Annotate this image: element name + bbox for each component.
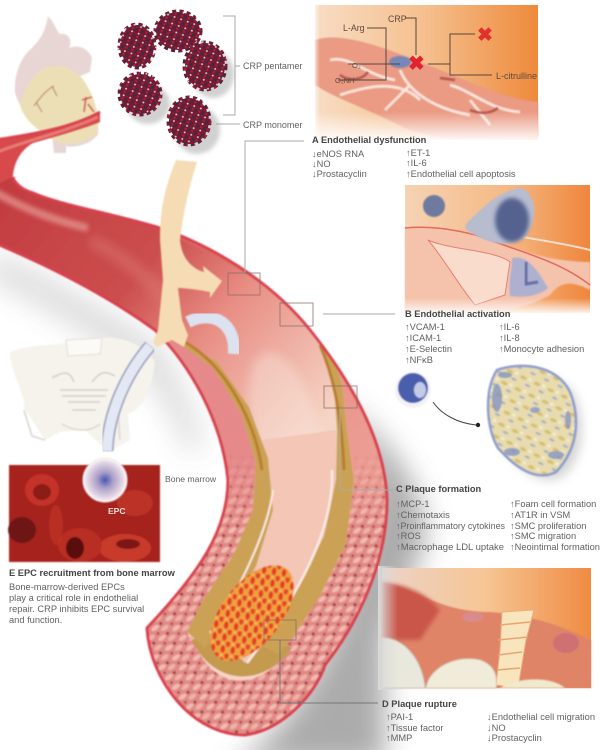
text: C plaque formation: ↑Foam cell formation <box>510 499 596 509</box>
lumen pale edges <box>210 490 273 633</box>
text: B endothelial activation: ↑IL-8 <box>499 333 520 343</box>
text: B endothelial activation: ↑VCAM-1 <box>405 322 445 332</box>
text: D plaque rupture: ↑MMP <box>386 733 412 743</box>
text: B endothelial activation: ↑Monocyte adhesion <box>499 344 584 354</box>
illustration: heart <box>15 16 98 153</box>
plaque band right <box>268 350 355 646</box>
text: D plaque rupture: D Plaque rupture <box>382 699 457 709</box>
text: B endothelial activation: ↑E-Selectin <box>405 344 452 354</box>
text: E EPC recruitment from bone marrow: repair. CRP inhibits EPC survival <box>9 604 144 614</box>
text: C plaque formation: ↑SMC proliferation <box>510 521 586 531</box>
wall cell texture <box>151 457 386 666</box>
text: C plaque formation: ↑SMC migration <box>510 531 576 541</box>
arrow: monocyte to foam cell <box>433 402 480 427</box>
illustration: foam cell <box>488 366 582 480</box>
panel: A endothelial dysfunction illustration <box>312 3 538 143</box>
label: CRP pentamer: CRP pentamer <box>243 61 302 71</box>
text: E EPC recruitment from bone marrow: and function. <box>9 615 62 625</box>
plaque rupture <box>210 564 295 662</box>
text: A endothelial dysfunction: A Endothelial dysfunction <box>312 135 427 145</box>
text: D plaque rupture: ↓Prostacyclin <box>487 733 542 743</box>
arrow: CRP to vessel <box>153 160 222 347</box>
text: C plaque formation: ↑Neointimal formation <box>510 542 600 552</box>
text: C plaque formation: ↑AT1R in VSM <box>510 510 570 520</box>
panel: EPC micrograph <box>8 465 160 562</box>
illustration: pelvis <box>10 337 155 452</box>
panel: D plaque rupture illustration <box>378 566 591 690</box>
text: D plaque rupture: ↓NO <box>487 723 506 733</box>
label: bone marrow: Bone marrow <box>165 474 217 484</box>
icon: red X on output: ✖ <box>477 25 493 46</box>
illustration: CRP pentamer clusters and monomer <box>120 12 234 154</box>
plaque band core <box>185 342 344 470</box>
text: C plaque formation <box>396 484 600 552</box>
text: C plaque formation: ↑Proinflammatory cytokines <box>396 521 505 531</box>
label: O2: O₂ <box>352 61 361 70</box>
plaque cup at lumen end <box>192 638 292 678</box>
text: A endothelial dysfunction: ↓eNOS RNA <box>312 149 365 159</box>
text: C plaque formation: ↑MCP-1 <box>396 499 430 509</box>
text: A endothelial dysfunction: ↓Prostacyclin <box>312 169 367 179</box>
right wall <box>180 238 386 520</box>
text: E EPC recruitment from bone marrow <box>9 568 176 625</box>
text: B endothelial activation: ↑IL-6 <box>499 322 520 332</box>
label: L-Arg: L-Arg <box>343 23 365 33</box>
arrow: blue curved arrow <box>188 317 234 354</box>
vessel drop shadow <box>0 250 425 750</box>
text: C plaque formation: ↑Macrophage LDL uptake <box>396 542 504 552</box>
panel: B endothelial activation illustration <box>405 185 590 315</box>
label: EPC: EPC <box>108 506 125 516</box>
text: D plaque rupture: ↓Endothelial cell migration <box>487 712 595 722</box>
text: C plaque formation: ↑Chemotaxis <box>396 510 450 520</box>
lumen highlight <box>246 350 314 440</box>
text: D plaque rupture: ↑PAI-1 <box>386 712 413 722</box>
icon: red X on eNOS: ✖ <box>408 53 425 75</box>
lumen lower part <box>242 430 336 662</box>
text: E EPC recruitment from bone marrow: E EPC recruitment from bone marrow <box>9 568 176 578</box>
text: B endothelial activation <box>405 309 584 365</box>
label: O2NH: O₂NH <box>335 76 355 85</box>
text: C plaque formation: C Plaque formation <box>396 484 482 494</box>
text: E EPC recruitment from bone marrow: Bone-marrow-derived EPCs <box>9 582 125 592</box>
icon: EPC cell <box>83 458 127 502</box>
illustration: blood vessel cross-section <box>0 112 392 735</box>
text: A endothelial dysfunction: ↑ET-1 <box>406 148 430 158</box>
text: E EPC recruitment from bone marrow: play a critical role in endothelial <box>9 593 138 603</box>
text: A endothelial dysfunction: ↑Endothelial cell apoptosis <box>406 169 516 179</box>
text: C plaque formation: ↑ROS <box>396 531 421 541</box>
text: B endothelial activation: ↑ICAM-1 <box>405 333 441 343</box>
label: CRP: CRP <box>388 14 407 24</box>
arrow: EPC tube from bone marrow <box>107 346 150 451</box>
text: A endothelial dysfunction: ↓NO <box>312 159 331 169</box>
left wall <box>168 340 257 522</box>
label: CRP monomer: CRP monomer <box>243 120 302 130</box>
callout lines and boxes <box>216 16 395 703</box>
vessel highlight streak <box>0 192 88 228</box>
text: D plaque rupture <box>382 699 595 743</box>
text: A endothelial dysfunction <box>312 135 516 179</box>
label: L-citrulline: L-citrulline <box>496 71 537 81</box>
plaque band left <box>184 344 274 640</box>
cut end of wall <box>154 636 324 734</box>
text: A endothelial dysfunction: ↑IL-6 <box>406 158 427 168</box>
text: B endothelial activation: B Endothelial activation <box>405 309 511 319</box>
narrow artery from heart <box>0 112 100 185</box>
text: B endothelial activation: ↑NFκB <box>405 355 433 365</box>
icon: monocyte <box>395 372 431 408</box>
text: D plaque rupture: ↑Tissue factor <box>386 723 444 733</box>
